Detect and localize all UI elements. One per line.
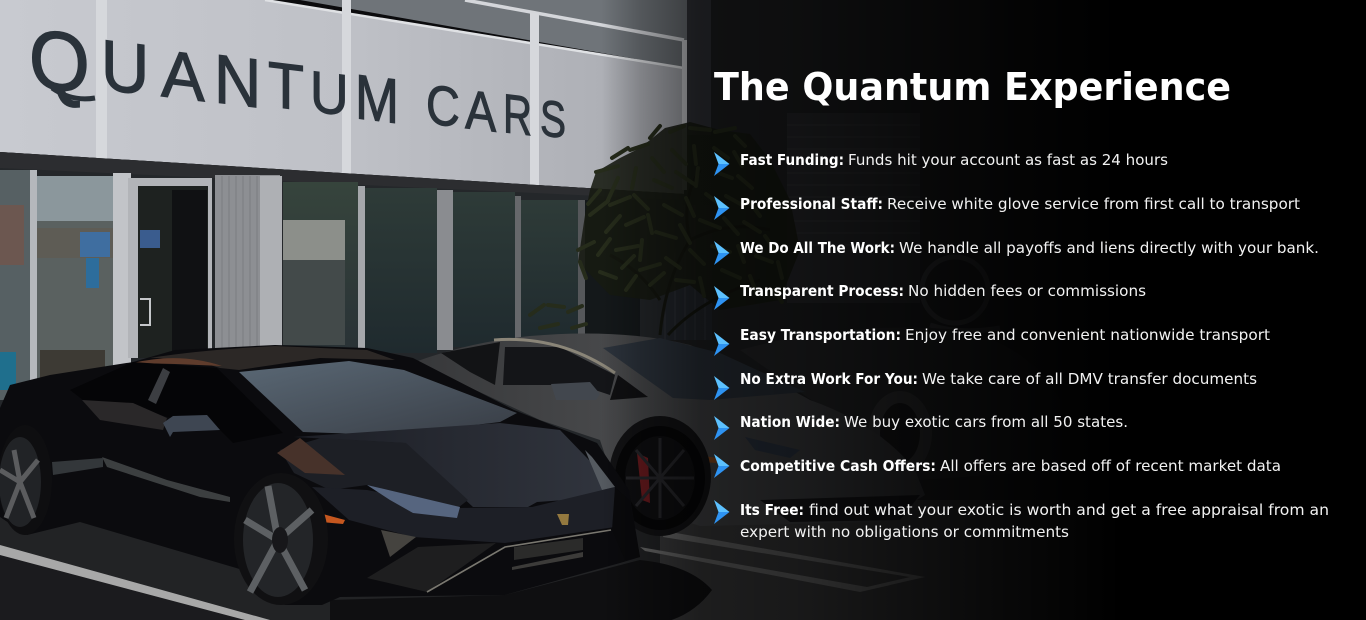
front intake xyxy=(381,530,416,557)
item: No Extra Work For You xyxy=(714,370,1257,400)
side window xyxy=(70,362,283,443)
item: We Do All The Work xyxy=(714,239,1319,265)
sign facade xyxy=(0,0,684,194)
windshield xyxy=(239,361,517,435)
tree xyxy=(530,122,800,335)
item: Nation Wide: We buy exotic cars from all 50 states. xyxy=(844,413,1128,431)
item: No Extra Work For You: No Extra Work For You: xyxy=(740,370,918,388)
orange marker xyxy=(319,513,345,524)
headlight xyxy=(367,485,460,518)
item: Professional Staff: Professional Staff: xyxy=(740,195,883,213)
item: Transparent Process: No hidden fees or commissions xyxy=(908,282,1146,300)
item: No Extra Work For You: We take care of all DMV transfer documents xyxy=(922,370,1257,388)
dark building to the right of the sign xyxy=(637,0,1122,520)
item: Transparent Process xyxy=(714,282,1146,310)
sign lettering: Quantum Cars: U xyxy=(310,58,349,128)
item: We Do All The Work: We Do All The Work: xyxy=(740,239,895,257)
item: Easy Transportation: Easy Transportation: xyxy=(740,326,901,344)
sign lettering: Quantum Cars: R xyxy=(503,83,532,148)
item: Its Free: Its Free: xyxy=(740,501,804,519)
second car: grey sports car xyxy=(415,333,925,536)
sign lettering: Quantum Cars: U xyxy=(101,24,149,110)
third car: dim car behind xyxy=(740,328,1060,480)
item: Competitive Cash Offers xyxy=(714,454,1281,478)
door shoulder reflection xyxy=(82,400,167,430)
door shine xyxy=(102,457,230,502)
item: Easy Transportation xyxy=(714,326,1270,356)
item: Nation Wide: Nation Wide: xyxy=(740,413,840,431)
hood xyxy=(294,423,615,507)
sign lettering: Quantum Cars: T xyxy=(268,49,304,125)
solid black right edge xyxy=(1122,0,1366,620)
item: Easy Transportation: Enjoy free and convenient nationwide transport xyxy=(905,326,1270,344)
nose xyxy=(312,487,629,543)
item: Fast Funding: Fast Funding: xyxy=(740,151,844,169)
item: Nation Wide xyxy=(714,413,1128,440)
front wheel xyxy=(234,473,328,605)
car body xyxy=(0,345,640,605)
soffit and storefront xyxy=(0,152,684,520)
front fender xyxy=(280,438,468,507)
item: Competitive Cash Offers: All offers are based off of recent market data xyxy=(940,457,1281,475)
sign lettering: Quantum Cars: M xyxy=(355,62,399,137)
sign lettering: Quantum Cars: Q xyxy=(29,12,90,112)
upper window band xyxy=(300,0,687,68)
item: Professional Staff xyxy=(714,195,1300,220)
sign lettering: Quantum Cars xyxy=(29,12,566,149)
sign lettering: Quantum Cars: C xyxy=(426,72,460,139)
item: Competitive Cash Offers: Competitive Cash Offers: xyxy=(740,457,936,475)
item: Its Free xyxy=(714,500,1329,541)
second car wheel xyxy=(609,416,711,536)
sign lettering: Quantum Cars: N xyxy=(214,41,261,123)
item: Transparent Process: Transparent Process: xyxy=(740,282,904,300)
rear wheel xyxy=(0,425,52,535)
sign lettering: Quantum Cars: A xyxy=(161,37,205,117)
title: The Quantum Experience xyxy=(714,65,1231,109)
item: Fast Funding: Funds hit your account as fast as 24 hours xyxy=(848,151,1168,169)
facade trim and poles xyxy=(96,0,687,193)
item: Its Free: find out what your exotic is worth and get a free appraisal from an xyxy=(809,501,1329,519)
sign lettering: Quantum Cars: S xyxy=(540,89,566,149)
item: Fast Funding xyxy=(714,151,1168,176)
item: We Do All The Work: We handle all payoffs and liens directly with your bank. xyxy=(899,239,1319,257)
badge xyxy=(557,514,569,525)
item: Its Free: expert with no obligations or commitments xyxy=(740,523,1069,541)
item: Professional Staff: Receive white glove service from first call to transport xyxy=(887,195,1300,213)
road xyxy=(0,500,1122,620)
main car: black sports car xyxy=(0,345,640,605)
roof reflection xyxy=(150,346,395,370)
benefits list xyxy=(714,151,1329,541)
sign lettering: Quantum Cars: A xyxy=(465,79,497,144)
side mirror xyxy=(163,415,220,437)
